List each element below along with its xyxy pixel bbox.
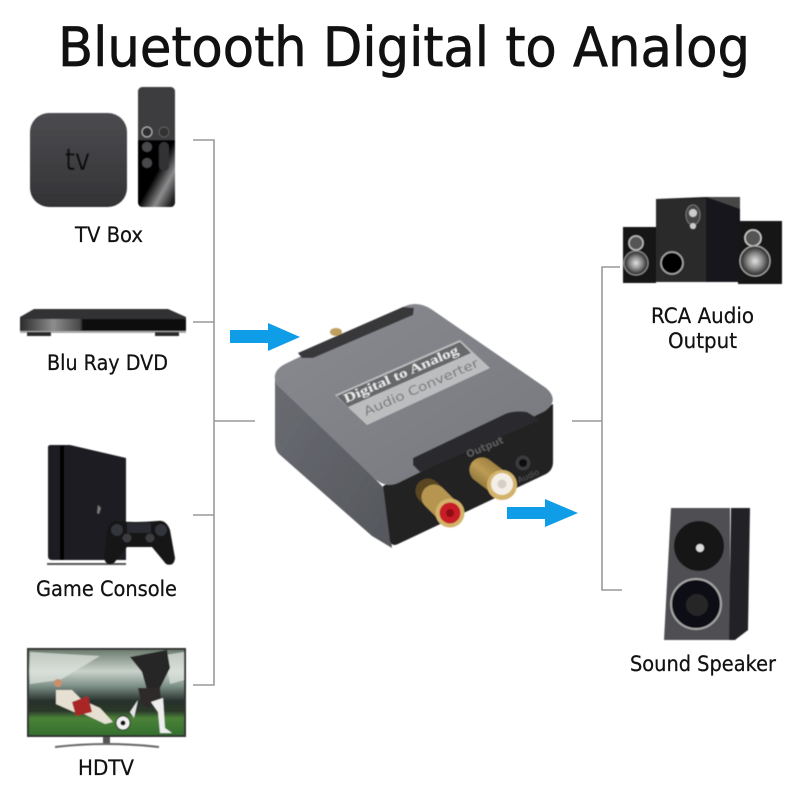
arrow: input [230,323,300,351]
label plate [335,340,490,425]
front notch [413,411,540,472]
label plate dark band [337,342,471,407]
label: TV Box: TV Box [74,223,143,247]
label: HDTV: HDTV [78,756,135,780]
icon: 2.1 speaker set [623,197,782,284]
icon: sound speaker [664,508,750,640]
label: RCA Audio Output: Output [668,329,737,353]
plate text: Audio Converter: Audio Converter [361,355,482,419]
icon: Blu Ray DVD player [20,309,186,336]
label: Blu Ray DVD: Blu Ray DVD [47,351,168,375]
back gold connector [330,328,342,336]
icon: HDTV with football match [27,648,186,747]
product: digital to analog converter [275,304,553,548]
left connector bracket [193,140,255,685]
white RCA connector [482,470,517,500]
icon: TV box and remote: tv [65,143,90,178]
label: RCA Audio Output [651,304,754,353]
label: Sound Speaker: Sound Speaker [630,652,776,676]
right connector bracket [572,267,622,590]
top face of case [275,304,553,485]
arrow: output [507,499,578,527]
black front panel [383,404,553,545]
top edge slot [298,307,414,358]
title: Bluetooth Digital to Analog [58,16,750,79]
label: Game Console: Game Console [36,577,177,601]
plate text: Digital to Analog: Digital to Analog [341,342,461,406]
panel text: Output: Output [465,435,506,461]
left side of case [275,375,392,548]
icon: game console and controller [47,445,175,565]
icon: TV box and remote [30,87,175,207]
audio jack [516,456,530,470]
red RCA connector [428,491,464,528]
label: RCA Audio Output: RCA Audio [651,304,754,328]
panel text: Audio: Audio [516,468,541,485]
